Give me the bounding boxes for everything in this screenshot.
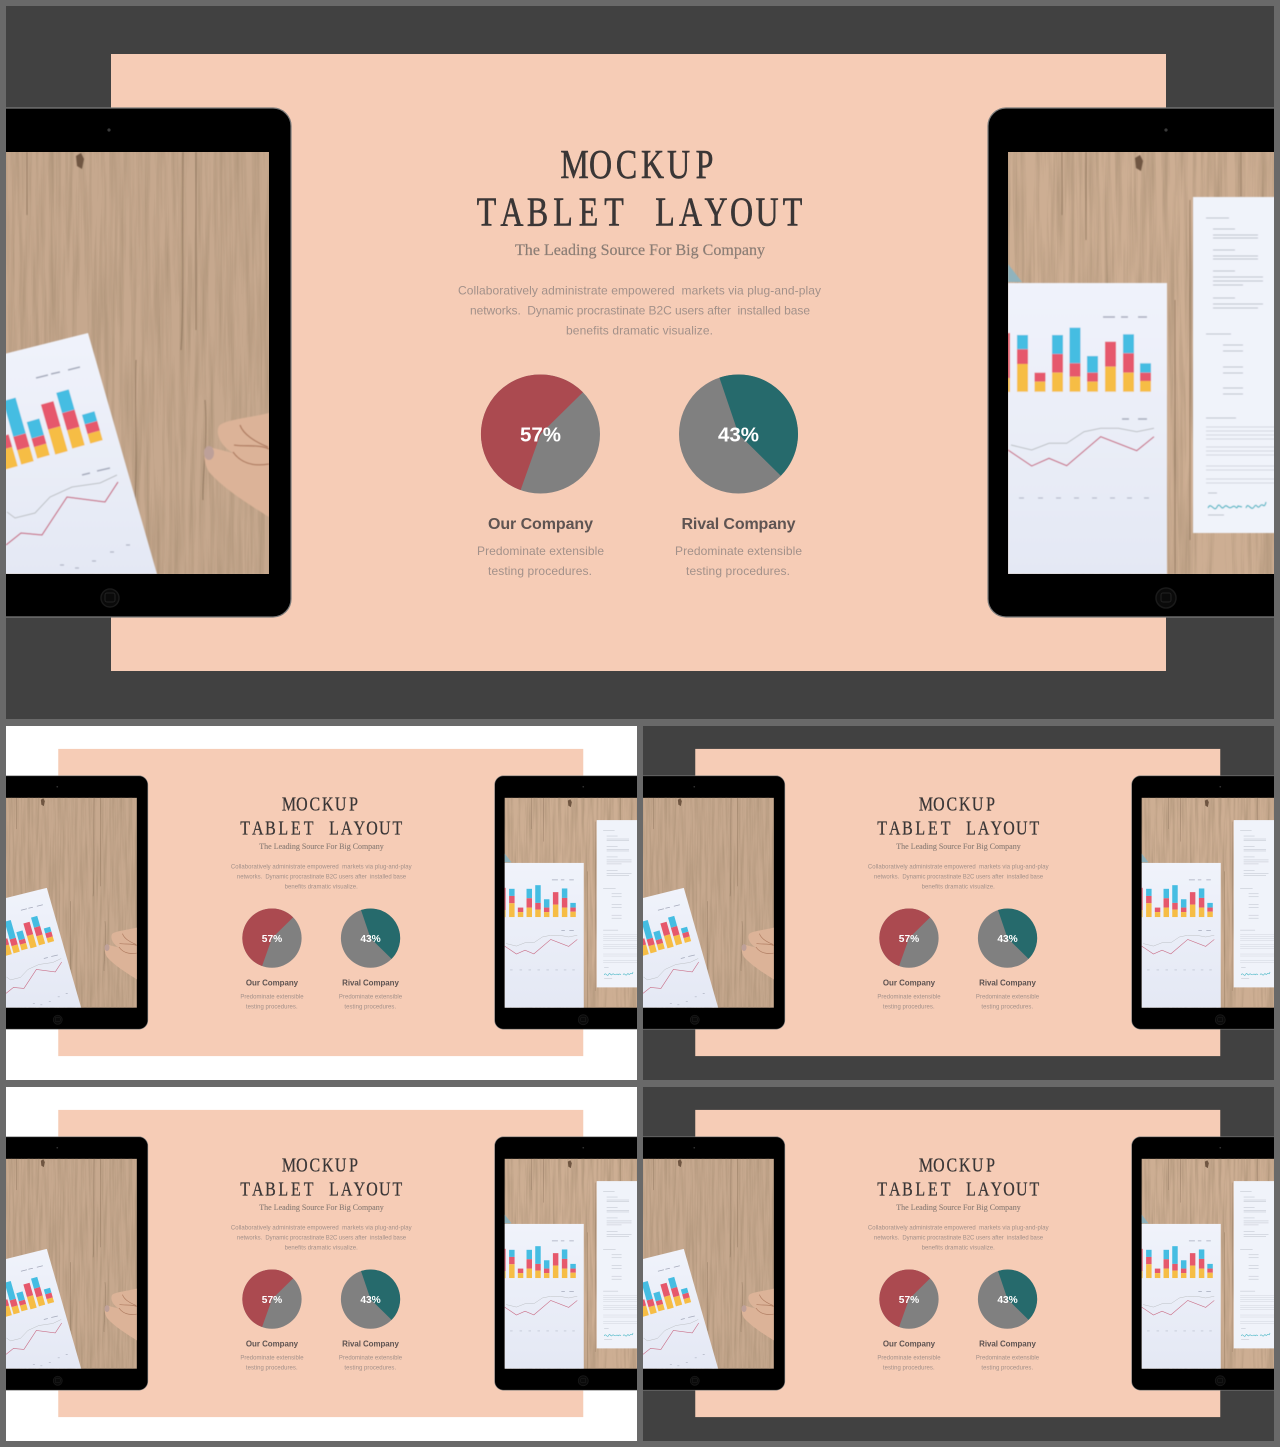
our company caption	[477, 516, 604, 578]
description: networks. Dynamic procrastinate B2C users after installed base	[874, 875, 1044, 881]
our company caption: testing procedures.	[246, 1004, 298, 1010]
our company caption	[240, 978, 304, 1010]
description: Collaboratively administrate empowered markets via plug-and-play	[231, 865, 412, 871]
description: benefits dramatic visualize.	[922, 1246, 995, 1252]
our company caption: Predominate extensible	[877, 1355, 941, 1361]
title: TABLET LAYOUT	[240, 1177, 402, 1200]
our company caption	[877, 1339, 941, 1371]
rival company caption	[976, 978, 1040, 1010]
pie chart: our company	[242, 1269, 302, 1329]
subtitle: The Leading Source For Big Company	[896, 1203, 1021, 1212]
pie chart: our company	[879, 908, 939, 968]
description: Collaboratively administrate empowered markets via plug-and-play	[231, 1226, 412, 1232]
description: networks. Dynamic procrastinate B2C users after installed base	[237, 875, 407, 881]
slide: dark top right	[643, 726, 1274, 1080]
description	[458, 284, 821, 338]
title: TABLET LAYOUT	[240, 816, 402, 839]
title: TABLET LAYOUT	[477, 189, 802, 234]
pie chart: our company: 57%	[262, 1295, 282, 1306]
rival company caption: Rival Company	[979, 978, 1036, 987]
rival company caption: Predominate extensible	[976, 994, 1040, 1000]
our company caption: Predominate extensible	[877, 994, 941, 1000]
title	[240, 1154, 402, 1200]
slide: dark bottom right	[643, 1087, 1274, 1441]
our company caption: Our Company	[246, 1339, 299, 1348]
pie chart: rival company	[341, 1269, 400, 1329]
pie chart: rival company	[978, 1269, 1037, 1329]
peach panel	[58, 1110, 583, 1417]
rival company caption: testing procedures.	[686, 564, 790, 578]
our company caption: testing procedures.	[883, 1365, 935, 1371]
title: MOCKUP	[282, 793, 358, 815]
our company caption	[877, 978, 941, 1010]
peach panel	[695, 1110, 1220, 1417]
pie chart: rival company: 43%	[997, 934, 1018, 945]
peach panel	[695, 749, 1220, 1056]
description: networks. Dynamic procrastinate B2C users after installed base	[237, 1236, 407, 1242]
pie chart: rival company	[978, 908, 1037, 968]
peach panel	[58, 749, 583, 1056]
title: MOCKUP	[919, 793, 995, 815]
our company caption: Our Company	[883, 1339, 936, 1348]
left tablet	[610, 776, 785, 1029]
title	[877, 1154, 1039, 1200]
slide background	[643, 1086, 1274, 1444]
our company caption: testing procedures.	[883, 1004, 935, 1010]
pie chart: rival company	[679, 374, 798, 494]
description	[231, 1226, 412, 1252]
subtitle: The Leading Source For Big Company	[259, 842, 384, 851]
subtitle: The Leading Source For Big Company	[896, 842, 1021, 851]
description: benefits dramatic visualize.	[566, 324, 713, 338]
peach panel	[111, 54, 1166, 671]
description	[868, 865, 1049, 891]
pie chart: our company: 57%	[899, 934, 919, 945]
rival company caption	[339, 978, 403, 1010]
title: TABLET LAYOUT	[877, 1177, 1039, 1200]
rival company caption: Rival Company	[682, 516, 796, 533]
our company caption: Predominate extensible	[240, 1355, 304, 1361]
our company caption	[240, 1339, 304, 1371]
our company caption: Predominate extensible	[477, 544, 604, 558]
title	[240, 793, 402, 839]
our company caption: Predominate extensible	[240, 994, 304, 1000]
left tablet	[0, 108, 291, 617]
pie chart: rival company: 43%	[997, 1295, 1018, 1306]
title	[877, 793, 1039, 839]
subtitle: The Leading Source For Big Company	[515, 242, 765, 259]
rival company caption	[976, 1339, 1040, 1371]
rival company caption: testing procedures.	[344, 1365, 396, 1371]
our company caption: testing procedures.	[246, 1365, 298, 1371]
pie chart: rival company	[341, 908, 400, 968]
description: benefits dramatic visualize.	[922, 885, 995, 891]
our company caption: testing procedures.	[488, 564, 592, 578]
slide background	[643, 725, 1274, 1083]
our company caption: Our Company	[246, 978, 299, 987]
slide background	[6, 725, 637, 1083]
left tablet	[0, 1137, 148, 1390]
title: TABLET LAYOUT	[877, 816, 1039, 839]
rival company caption: testing procedures.	[981, 1365, 1033, 1371]
description: benefits dramatic visualize.	[285, 885, 358, 891]
description: networks. Dynamic procrastinate B2C users after installed base	[470, 304, 810, 318]
rival company caption: testing procedures.	[344, 1004, 396, 1010]
rival company caption: Predominate extensible	[339, 994, 403, 1000]
pie chart: our company	[879, 1269, 939, 1329]
pie chart: our company: 57%	[262, 934, 282, 945]
left tablet	[610, 1137, 785, 1390]
description	[231, 865, 412, 891]
title: MOCKUP	[282, 1154, 358, 1176]
description: benefits dramatic visualize.	[285, 1246, 358, 1252]
title	[477, 141, 802, 234]
description	[868, 1226, 1049, 1252]
our company caption: Our Company	[883, 978, 936, 987]
rival company caption: testing procedures.	[981, 1004, 1033, 1010]
right tablet	[1132, 776, 1280, 1029]
rival company caption: Rival Company	[979, 1339, 1036, 1348]
description: Collaboratively administrate empowered markets via plug-and-play	[868, 865, 1049, 871]
rival company caption: Predominate extensible	[339, 1355, 403, 1361]
rival company caption: Predominate extensible	[675, 544, 802, 558]
pie chart: our company: 57%	[899, 1295, 919, 1306]
subtitle: The Leading Source For Big Company	[259, 1203, 384, 1212]
title: MOCKUP	[919, 1154, 995, 1176]
pie chart: rival company: 43%	[360, 1295, 381, 1306]
description: Collaboratively administrate empowered markets via plug-and-play	[458, 284, 821, 298]
slide: white bottom left	[6, 1087, 637, 1441]
slide: white top left	[6, 726, 637, 1080]
rival company caption: Predominate extensible	[976, 1355, 1040, 1361]
rival company caption: Rival Company	[342, 978, 399, 987]
rival company caption	[675, 516, 802, 578]
right tablet	[1132, 1137, 1280, 1390]
right tablet	[988, 108, 1280, 617]
rival company caption	[339, 1339, 403, 1371]
right tablet	[495, 776, 669, 1029]
slide background	[6, 6, 1274, 726]
slide background	[6, 1086, 637, 1444]
pie chart: our company	[242, 908, 302, 968]
pie chart: rival company: 43%	[718, 424, 759, 446]
description: Collaboratively administrate empowered markets via plug-and-play	[868, 1226, 1049, 1232]
right tablet	[495, 1137, 669, 1390]
pie chart: our company: 57%	[520, 424, 561, 446]
title: MOCKUP	[560, 141, 713, 187]
our company caption: Our Company	[488, 516, 593, 533]
left tablet	[0, 776, 148, 1029]
rival company caption: Rival Company	[342, 1339, 399, 1348]
slide: main dark	[6, 6, 1274, 719]
description: networks. Dynamic procrastinate B2C users after installed base	[874, 1236, 1044, 1242]
pie chart: rival company: 43%	[360, 934, 381, 945]
pie chart: our company	[481, 374, 600, 494]
